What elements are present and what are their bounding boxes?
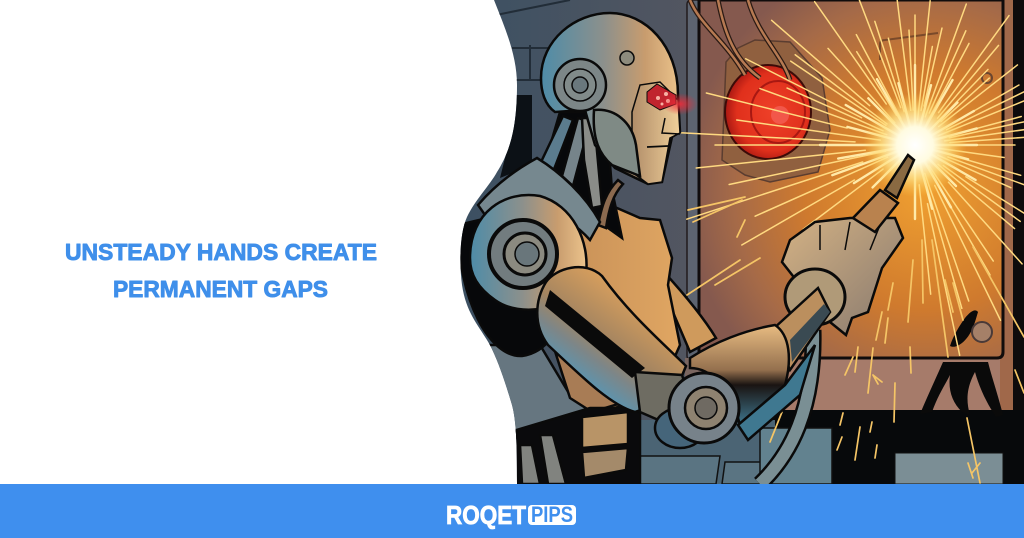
upper arm [537,267,686,412]
wrist ring [785,269,845,325]
hand [782,218,903,335]
heading [65,239,377,302]
mouth [647,146,668,147]
red eye [647,84,676,110]
chest [581,206,682,407]
lower left wall tone [685,358,702,377]
piston rods [772,288,830,370]
jaw plate [594,110,640,176]
panel bolt [972,322,992,342]
piston shadow [790,304,830,362]
elbow lower ring [655,408,705,448]
lower ribs [487,345,590,438]
back arm [664,272,716,352]
dome [541,13,680,184]
sparks [680,0,1024,355]
heading line 1: UNSTEADY HANDS CREATE [65,239,377,265]
neck tube middle [564,120,582,184]
heading line 2: PERMANENT GAPS [113,276,328,302]
abdomen plate lower [582,450,627,476]
red button [725,65,811,159]
forearm [690,325,789,425]
illustration: robot welding a panel [455,0,1024,484]
neck tube left [541,118,572,168]
torch tip [885,155,914,198]
wall dark vent [500,95,532,178]
footer bar [0,484,1024,538]
logo word PIPS: PIPS [531,502,573,527]
neck backing [543,112,622,238]
wires [690,0,790,80]
lower panel band [784,359,1000,410]
weld flare [863,93,967,197]
ear disc [554,59,606,111]
scorch marks [920,310,1003,417]
right side strip [1000,0,1014,412]
elbow link [635,372,690,425]
cuff under arm [738,345,815,440]
arm dark seam [545,290,645,378]
falling sparks [687,197,1024,483]
hose outline [760,330,813,484]
lower plate left [640,456,770,484]
shoulder cap [478,158,600,240]
robot body [458,112,914,484]
logo word ROQET: ROQET [446,500,526,530]
abdomen plate upper [582,412,628,448]
neck tube copper [598,180,623,228]
lower plate right [895,453,1003,484]
torch handle [853,190,898,232]
hip strips [520,435,566,484]
shoulder disc [489,220,557,288]
logo badge [528,505,576,525]
face plate [632,82,680,184]
black floor band [770,410,1024,484]
back wall [460,0,688,481]
robot head [541,13,680,184]
inner spark burst [820,65,977,219]
head bolt [620,51,634,65]
shoulder dark underside [458,215,565,356]
neck tube front [582,118,602,208]
nose shadow [662,118,680,134]
abdomen [554,352,618,408]
panel upper bolt [982,73,992,83]
metal panel with orange glow [699,0,1003,358]
torn rim around button [722,40,830,182]
panel inset outline [880,33,938,60]
finger lines [820,222,880,250]
panel frame strip [686,0,698,358]
elbow disc [669,373,739,443]
hose [760,330,813,484]
waist block [510,408,640,484]
shoulder outer [470,195,587,310]
logo [446,500,576,530]
wall seam lines [496,0,570,80]
wire highlights [690,0,790,80]
laser glow [662,93,698,115]
lower plate blue [760,428,832,484]
right dark strip [1013,0,1024,410]
eye lights [656,92,670,106]
lower grey plates [640,420,775,484]
